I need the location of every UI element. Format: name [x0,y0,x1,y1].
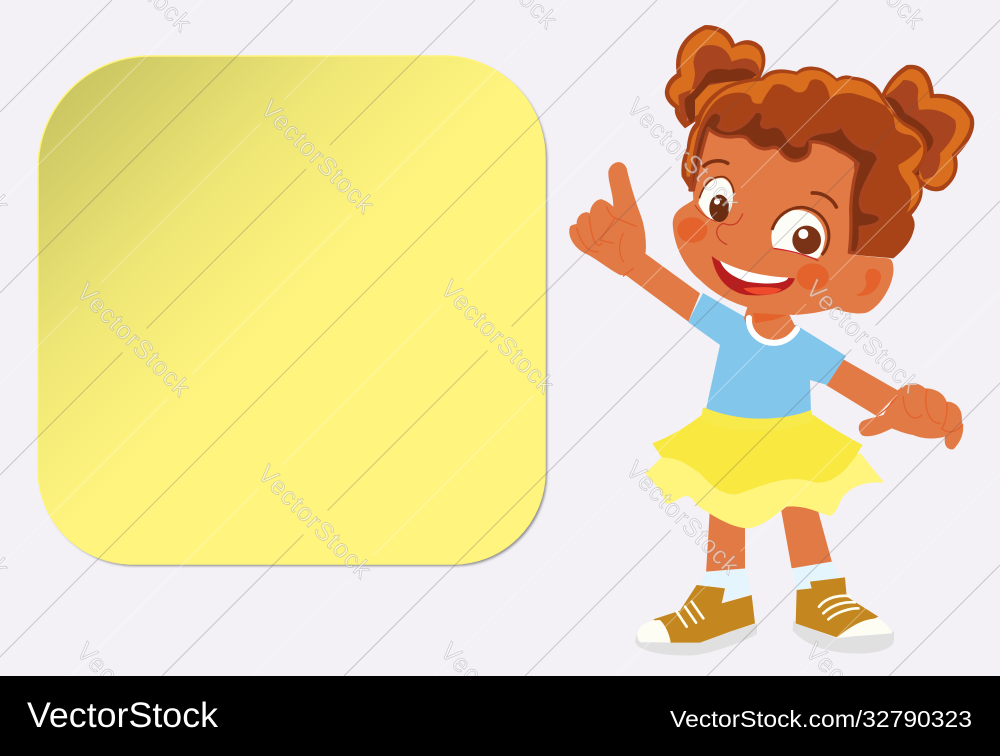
right eyebrow [812,193,836,207]
girl: neck and collar [744,305,797,343]
ear inner [855,269,881,296]
watermarks: VectorStock [71,278,196,403]
left eye [695,177,734,222]
nose [717,214,743,244]
upper skirt [652,415,863,494]
watermarks: VectorStock [435,275,560,400]
left sock [700,568,751,601]
left leg [706,507,745,573]
hair fringe [690,111,881,253]
girl character [569,25,974,656]
left shoe [635,585,757,656]
panel: card shadow [40,58,547,566]
hair highlight band [686,70,923,213]
footer bar [0,676,1000,756]
watermarks: VectorStock [255,95,380,220]
hair behind face [665,25,974,258]
footer image id text: VectorStock.com/32790323 [670,706,972,732]
lower skirt [645,453,884,528]
left eyebrow [704,161,728,166]
watermarks: Vec [71,637,123,690]
left hair bun [665,25,765,128]
right hair bun [882,65,974,191]
girl: raised arm and hand [569,162,700,322]
girl: pointing-down arm [826,358,963,449]
watermarks: Vec [800,637,852,690]
girl: blue t-shirt [688,293,846,421]
right shoe [793,577,894,654]
watermarks: Vec [435,637,487,690]
right blush [797,263,829,290]
watermarks: VectorStock [252,460,377,585]
footer logo text: VectorStock [27,696,219,735]
face and ear [673,125,893,315]
main hair [681,66,927,258]
girl: skirt waistband [701,407,814,431]
left blush [677,217,707,243]
watermarks: VectorStock [621,93,746,218]
mouth [712,256,795,295]
watermarks: VectorStock [800,275,925,400]
girl: legs, shoes, skirt [635,415,894,656]
girl: head [665,25,974,315]
right eye [771,207,829,261]
panel: yellow rounded note [38,56,545,564]
right leg [779,500,832,568]
right sock [792,562,841,591]
watermarks: VectorStock [620,456,745,581]
